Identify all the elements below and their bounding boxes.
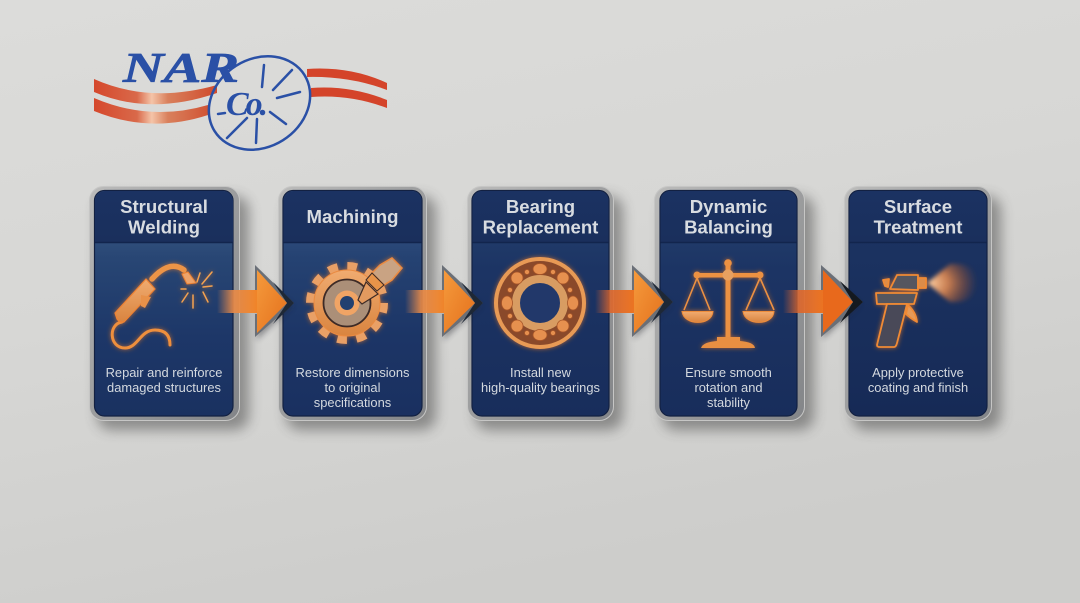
arrow 4 [783, 265, 863, 339]
arrow 1 [217, 265, 294, 340]
arrow 2 [405, 265, 483, 340]
header band [472, 191, 608, 242]
panel: bearing replacement [468, 186, 623, 430]
icon: ball bearing [496, 259, 584, 347]
heading: Treatment [874, 216, 962, 238]
heading: Welding [128, 216, 200, 238]
description: Install new [510, 365, 572, 380]
logo sun disc [191, 38, 328, 168]
description: to original [325, 380, 380, 395]
panel: dynamic balancing [654, 186, 814, 430]
logo NAR wordmark: NAR [122, 46, 239, 92]
description: Repair and reinforce [106, 365, 222, 380]
panel: machining [278, 186, 436, 430]
arrow 3 [595, 265, 673, 339]
logo: NARCo [94, 38, 387, 168]
heading: Balancing [684, 216, 773, 238]
icon: welding torch [112, 266, 212, 348]
header band [95, 191, 233, 242]
spray cloud [927, 264, 977, 302]
logo left stripes [94, 79, 217, 124]
header band [660, 191, 796, 242]
description: stability [707, 395, 751, 410]
heading: Surface [884, 196, 952, 217]
panel: surface treatment [844, 186, 1001, 430]
icon: balance scale [682, 259, 774, 348]
description: specifications [314, 395, 391, 410]
description: Restore dimensions [296, 365, 409, 380]
description: coating and finish [868, 380, 968, 395]
icon: gear and cutting tool [310, 258, 402, 340]
logo Co. wordmark: Co. [226, 86, 268, 123]
header band [284, 191, 422, 242]
heading: Replacement [483, 216, 598, 238]
description: rotation and [694, 380, 763, 395]
heading: Bearing [506, 196, 575, 217]
description: Ensure smooth [685, 365, 772, 380]
heading: Dynamic [690, 196, 767, 217]
header band [850, 191, 986, 242]
heading: Machining [307, 206, 398, 227]
panel: structural welding [90, 186, 249, 430]
logo right stripes [307, 69, 387, 108]
heading: Structural [120, 196, 208, 217]
description: damaged structures [107, 380, 221, 395]
icon: spray gun [876, 264, 977, 347]
description: Apply protective [872, 365, 964, 380]
description: high-quality bearings [481, 380, 600, 395]
